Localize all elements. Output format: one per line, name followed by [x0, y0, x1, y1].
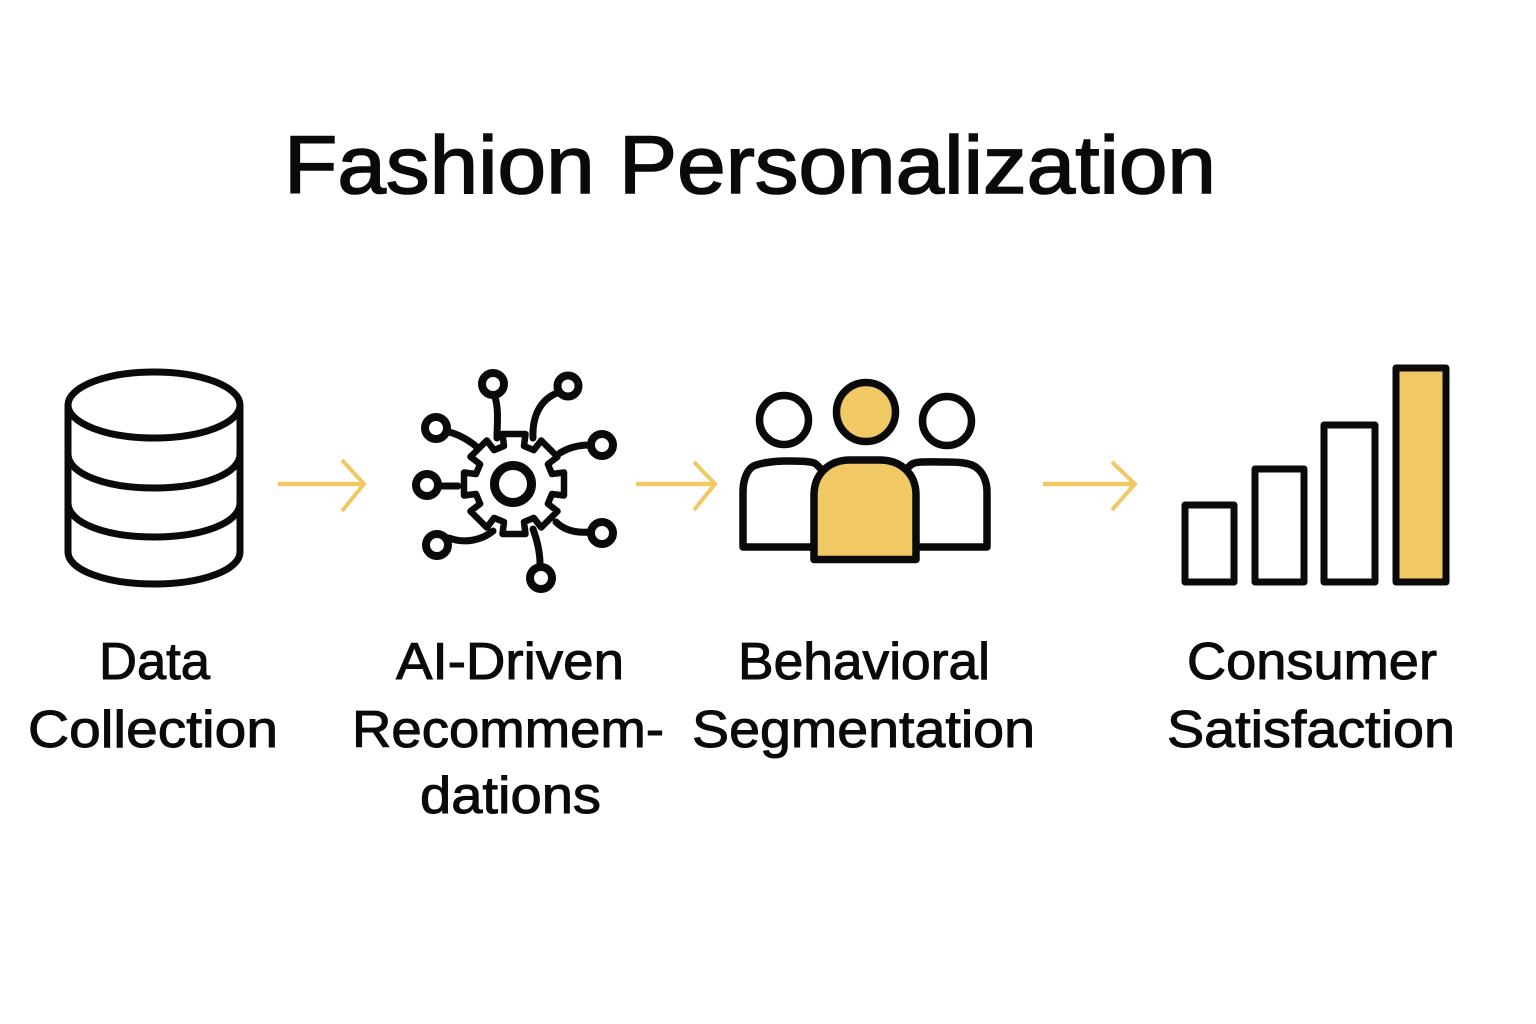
arrow 2 [636, 462, 715, 510]
label: AI-driven recommendations [352, 633, 664, 825]
label: consumer satisfaction: Satisfaction [1167, 701, 1455, 759]
icon: bar chart [1185, 368, 1446, 582]
label: AI-driven recommendations: dations [420, 767, 601, 825]
label: AI-driven recommendations: Recommem- [352, 701, 664, 759]
label: behavioral segmentation [692, 633, 1035, 759]
label: consumer satisfaction: Consumer [1187, 633, 1437, 691]
label: AI-driven recommendations: AI-Driven [396, 633, 624, 691]
arrow 1 [278, 460, 364, 511]
label: behavioral segmentation: Behavioral [738, 633, 990, 691]
icon: AI gear network [416, 373, 613, 589]
arrow 3 [1043, 462, 1135, 510]
label: data collection: Data [99, 633, 210, 691]
label: consumer satisfaction [1167, 633, 1455, 759]
title: Fashion Personalization [284, 120, 1216, 211]
label: data collection [28, 633, 278, 759]
icon: database [68, 372, 240, 584]
icon: people group [743, 382, 987, 560]
label: data collection: Collection [28, 701, 278, 759]
label: behavioral segmentation: Segmentation [692, 701, 1035, 759]
